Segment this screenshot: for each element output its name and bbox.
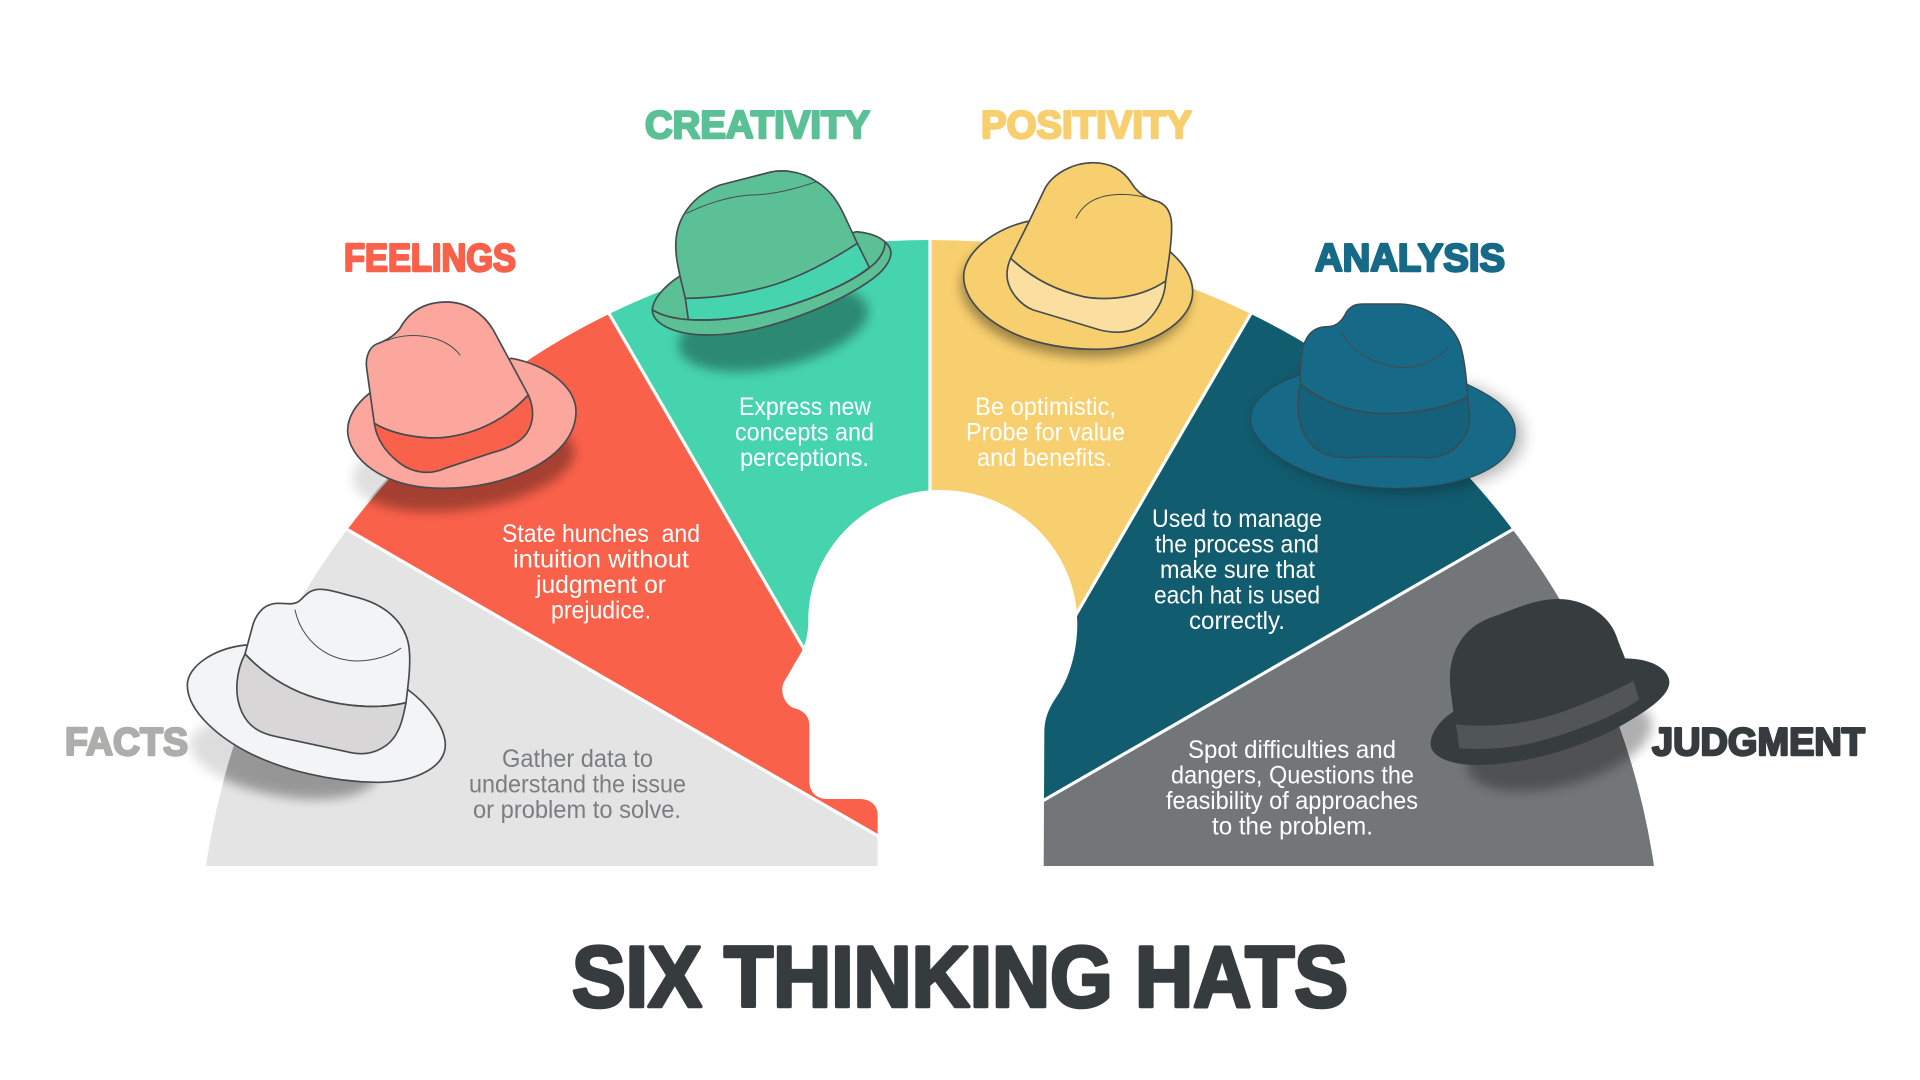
hat: green (creativity) — [652, 171, 891, 387]
hat: white (facts) — [184, 589, 445, 812]
hat: teal (analysis) — [1251, 304, 1523, 492]
label: JUDGMENT: JUDGMENT — [1652, 721, 1865, 764]
segment: facts — [206, 530, 930, 866]
text: creativity description: concepts and — [735, 418, 874, 446]
text: positivity description — [966, 393, 1125, 472]
text: facts description: understand the issue — [469, 770, 686, 798]
text: creativity description: Express new — [739, 393, 872, 421]
text: judgment description — [1166, 736, 1418, 840]
hat: red (feelings) — [346, 302, 580, 524]
label: CREATIVITY: CREATIVITY — [645, 104, 870, 147]
text: facts description: Gather data to — [502, 745, 653, 773]
title: SIX THINKING HATS — [572, 930, 1348, 1026]
segment: feelings — [347, 314, 930, 866]
text: analysis description: Used to manage — [1152, 505, 1322, 533]
text: judgment description: Spot difficulties and — [1188, 736, 1396, 764]
text: positivity description: Be optimistic, — [975, 393, 1116, 421]
label: POSITIVITY: POSITIVITY — [981, 104, 1192, 147]
text: feelings description: State hunches and — [502, 520, 700, 548]
text: analysis description: each hat is used — [1154, 582, 1320, 610]
segment: judgment — [930, 530, 1654, 866]
text: positivity description: Probe for value — [966, 418, 1125, 446]
segment: positivity — [930, 240, 1251, 866]
text: creativity description — [735, 393, 874, 472]
text: analysis description — [1152, 505, 1322, 635]
text: facts description: or problem to solve. — [473, 796, 681, 824]
text: feelings description: prejudice. — [551, 596, 651, 624]
hat: black (judgment) — [1431, 599, 1669, 809]
text: analysis description: correctly. — [1189, 607, 1285, 635]
text: analysis description: make sure that — [1160, 556, 1315, 584]
semicircle fan chart — [206, 236, 1654, 866]
text: feelings description — [502, 520, 700, 624]
text: facts description — [469, 745, 686, 824]
label: FEELINGS: FEELINGS — [344, 237, 516, 280]
text: feelings description: judgment or — [535, 571, 666, 599]
segment: creativity — [609, 240, 930, 866]
label: ANALYSIS: ANALYSIS — [1315, 237, 1505, 280]
text: feelings description: intuition without — [513, 546, 689, 574]
text: creativity description: perceptions. — [740, 444, 869, 472]
head silhouette — [782, 490, 1077, 872]
text: judgment description: to the problem. — [1212, 812, 1373, 840]
label: FACTS: FACTS — [65, 721, 188, 764]
hat: yellow (positivity) — [961, 163, 1193, 357]
text: judgment description: feasibility of approaches — [1166, 787, 1418, 815]
text: positivity description: and benefits. — [977, 444, 1112, 472]
text: analysis description: the process and — [1155, 530, 1319, 558]
segment: analysis — [930, 314, 1513, 866]
text: judgment description: dangers, Questions the — [1171, 762, 1414, 790]
